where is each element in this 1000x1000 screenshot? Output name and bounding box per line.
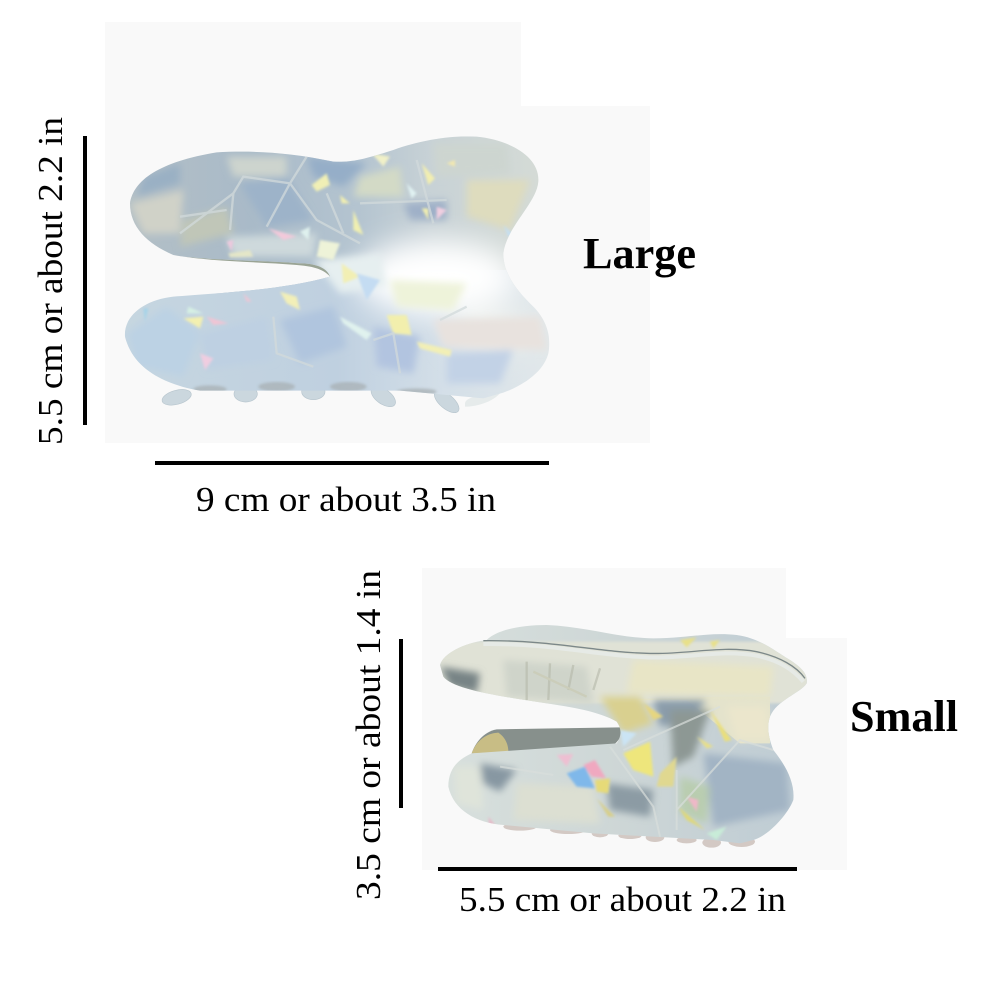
dimension line: large width xyxy=(155,461,549,465)
heading: Small: Small xyxy=(850,692,958,741)
dimension line: small height xyxy=(399,639,403,808)
image: large iridescent hair claw clip xyxy=(120,133,553,417)
label: small height: 3.5 cm or about 1.4 in xyxy=(349,570,388,900)
image: small iridescent hair claw clip xyxy=(437,620,813,850)
label: large width: 9 cm or about 3.5 in xyxy=(196,480,496,519)
label: small width: 5.5 cm or about 2.2 in xyxy=(459,880,786,919)
label: large height: 5.5 cm or about 2.2 in xyxy=(31,117,70,445)
panel: large clip backdrop xyxy=(105,22,650,443)
panel: small clip backdrop xyxy=(422,568,847,870)
dimension line: small width xyxy=(438,867,797,871)
dimension line: large height xyxy=(83,136,87,425)
heading: Large: Large xyxy=(583,229,696,278)
